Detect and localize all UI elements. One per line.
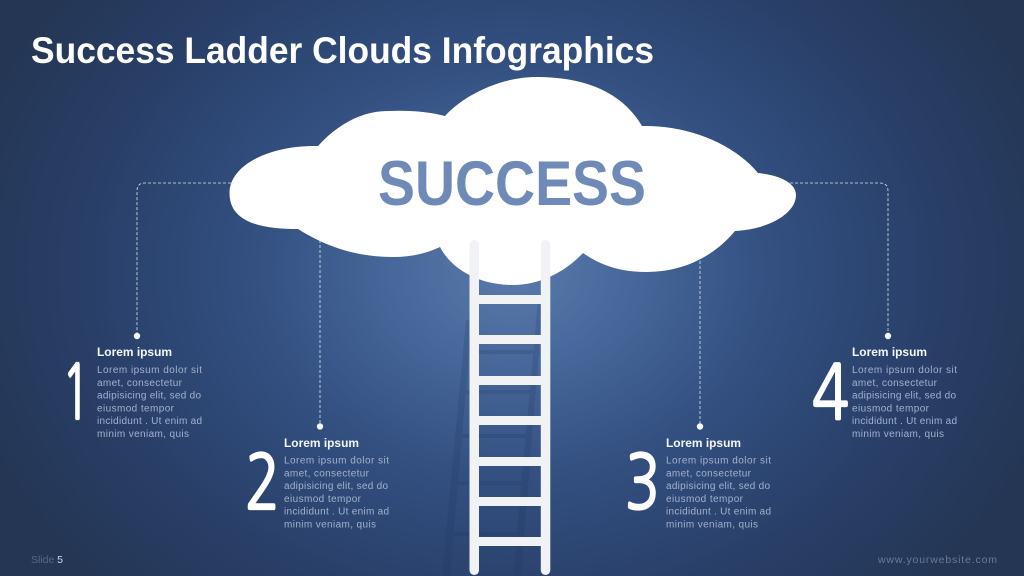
ladder shadow xyxy=(442,300,543,576)
step 4: adipisicing elit, sed do xyxy=(852,390,956,402)
step 1: eiusmod tempor xyxy=(97,404,175,414)
slide number: Slide 5 xyxy=(31,554,63,566)
step 3: amet, consectetur xyxy=(666,468,752,480)
success label: SUCCESS xyxy=(378,149,646,219)
step 2 xyxy=(245,436,389,530)
step 3 xyxy=(625,436,771,530)
step 4: Lorem ipsum xyxy=(852,345,927,359)
step 4: eiusmod tempor xyxy=(852,404,930,414)
step 1: amet, consectetur xyxy=(97,378,183,389)
step 3: incididunt . Ut enim ad xyxy=(666,506,771,518)
step 4 xyxy=(812,345,957,440)
step 3: minim veniam, quis xyxy=(666,520,758,530)
step 2: minim veniam, quis xyxy=(284,520,376,530)
step 1 xyxy=(62,345,202,440)
step 2: 2 xyxy=(245,445,280,520)
website: www.yourwebsite.com xyxy=(877,554,997,566)
step 1: adipisicing elit, sed do xyxy=(97,390,201,402)
step 3: adipisicing elit, sed do xyxy=(666,481,770,492)
step 1: minim veniam, quis xyxy=(97,429,189,440)
step 3: Lorem ipsum xyxy=(666,436,741,450)
title: Success Ladder Clouds Infographics xyxy=(31,30,654,71)
ladder xyxy=(470,240,550,575)
step 2: incididunt . Ut enim ad xyxy=(284,506,389,518)
connector lines xyxy=(134,183,891,430)
step 2: amet, consectetur xyxy=(284,468,370,480)
step 4: incididunt . Ut enim ad xyxy=(852,416,957,427)
step 3: 3 xyxy=(625,445,660,520)
step 2: eiusmod tempor xyxy=(284,494,362,505)
step 1: Lorem ipsum xyxy=(97,345,172,359)
step 4: minim veniam, quis xyxy=(852,429,944,440)
step 1: incididunt . Ut enim ad xyxy=(97,416,202,427)
step 1: Lorem ipsum dolor sit xyxy=(97,365,202,376)
step 4: 4 xyxy=(812,355,849,430)
step 3: Lorem ipsum dolor sit xyxy=(666,456,771,466)
cloud xyxy=(230,77,796,285)
step 2: adipisicing elit, sed do xyxy=(284,481,388,492)
step 1: 1 xyxy=(62,355,90,430)
step 3: eiusmod tempor xyxy=(666,494,744,505)
step 4: amet, consectetur xyxy=(852,378,938,389)
step 2: Lorem ipsum dolor sit xyxy=(284,456,389,466)
step 2: Lorem ipsum xyxy=(284,436,359,450)
step 4: Lorem ipsum dolor sit xyxy=(852,365,957,376)
